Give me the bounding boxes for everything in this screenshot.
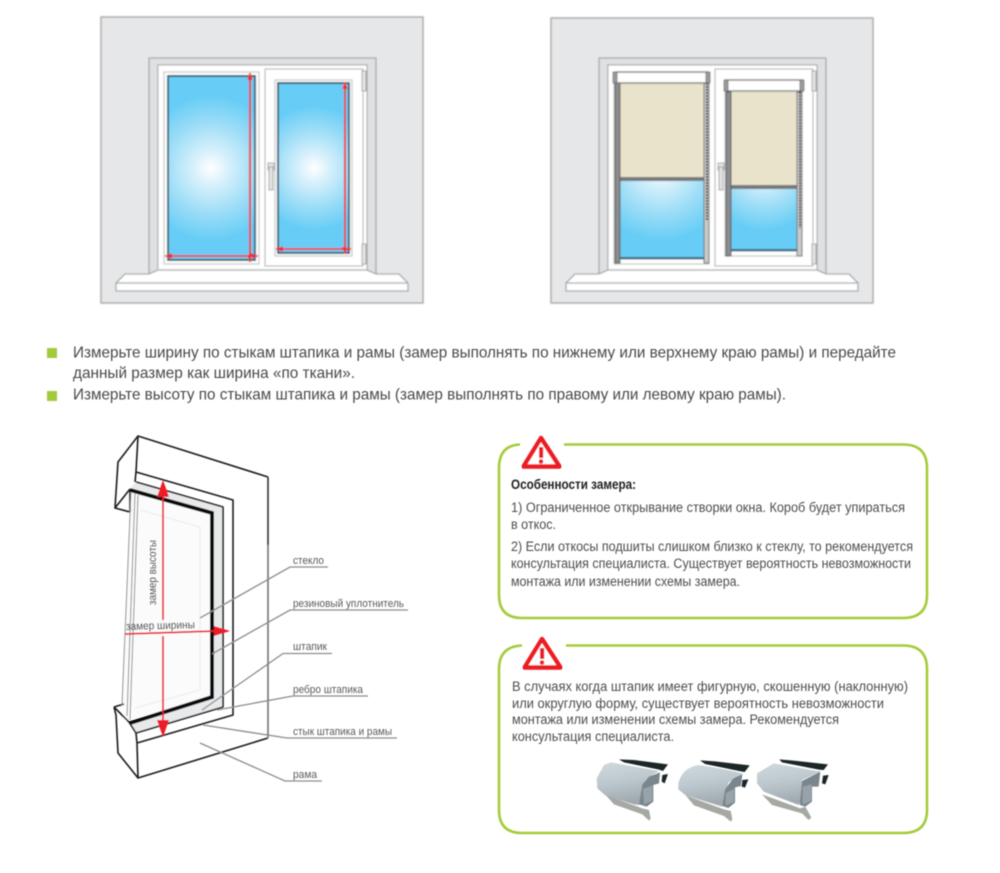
label: height measurement: замер высоты bbox=[147, 540, 159, 605]
wall bbox=[101, 17, 423, 303]
window sill bbox=[116, 270, 408, 291]
window reveal bbox=[599, 58, 826, 274]
panel: measurement features bbox=[499, 438, 927, 618]
icon: warning triangle bbox=[524, 438, 560, 466]
label: rubber seal: резиновый уплотнитель bbox=[293, 598, 404, 610]
instructions list bbox=[47, 344, 896, 404]
icon: warning triangle bbox=[524, 639, 560, 668]
panel heading: Особенности замера: bbox=[511, 477, 636, 492]
left glass edges bbox=[122, 492, 138, 720]
frame bbox=[608, 65, 817, 271]
instruction 1 line 2: данный размер как ширина «по ткани». bbox=[73, 365, 355, 382]
diagram labels bbox=[126, 540, 404, 781]
frame outline bbox=[114, 436, 268, 778]
note 2 bbox=[511, 539, 913, 589]
panel text bbox=[511, 477, 913, 589]
panel text: консультация специалиста. bbox=[512, 729, 674, 744]
label: bead: штапик bbox=[293, 641, 327, 653]
leader lines bbox=[200, 567, 408, 781]
left blind bbox=[613, 72, 710, 264]
fixed pane bbox=[164, 72, 259, 264]
bead profiles bbox=[597, 759, 829, 822]
window with measurement lines bbox=[101, 17, 423, 303]
note 1: 1) Ограниченное открывание створки окна. Короб будет упираться bbox=[511, 500, 905, 515]
label: bead rib: ребро штапика bbox=[293, 684, 364, 696]
note 2: монтажа или изменении схемы замера. bbox=[511, 574, 740, 589]
note 1 bbox=[511, 500, 905, 532]
panel border bbox=[499, 444, 927, 618]
note 1: в откос. bbox=[511, 517, 556, 532]
profile: faceted bbox=[597, 759, 668, 821]
window reveal bbox=[149, 58, 376, 274]
note 2: 2) Если откосы подшиты слишком близко к стеклу, то рекомендуется bbox=[511, 539, 913, 554]
frame bbox=[158, 65, 367, 271]
panel text bbox=[512, 679, 908, 744]
panel text: монтажа или изменении схемы замера. Рекомендуется bbox=[512, 712, 839, 727]
label: width measurement: замер ширины bbox=[126, 619, 195, 633]
window with roller blinds bbox=[551, 18, 873, 303]
window sill bbox=[566, 270, 858, 291]
profile: rounded bbox=[678, 760, 750, 822]
instruction 1 line 1: Измерьте ширину по стыкам штапика и рамы (замер выполнять по нижнему или верхнему краю рамы) и передайте bbox=[73, 344, 896, 362]
bullet 2 bbox=[47, 391, 57, 401]
label: bead and frame joint: стык штапика и рамы bbox=[293, 726, 392, 738]
red measurement lines bbox=[165, 73, 351, 262]
right frame edge bbox=[267, 477, 269, 545]
note 2: консультация специалиста. Существует вероятность невозможности bbox=[511, 556, 911, 571]
panel: bead shapes bbox=[499, 639, 927, 833]
right blind sash bbox=[715, 69, 813, 266]
red arrows bbox=[125, 480, 230, 737]
hinges and handle bbox=[718, 71, 816, 264]
glass and bead fills bbox=[123, 490, 212, 722]
label: frame: рама bbox=[293, 769, 318, 781]
panel text: В случаях когда штапик имеет фигурную, скошенную (наклонную) bbox=[512, 679, 908, 694]
wall bbox=[551, 18, 873, 303]
panel text: или округлую форму, существует вероятность невозможности bbox=[512, 696, 884, 711]
hinges and handle bbox=[268, 71, 366, 264]
profile: angular bbox=[757, 759, 829, 820]
opening sash bbox=[265, 69, 363, 266]
panel border bbox=[499, 646, 927, 833]
window frame cross-section diagram bbox=[114, 436, 408, 781]
rubber seal bbox=[130, 490, 212, 723]
instruction 2: Измерьте высоту по стыкам штапика и рамы (замер выполнять по правому или левому краю рамы). bbox=[73, 386, 786, 404]
label: glass: стекло bbox=[293, 555, 324, 567]
bullet 1 bbox=[47, 348, 57, 358]
